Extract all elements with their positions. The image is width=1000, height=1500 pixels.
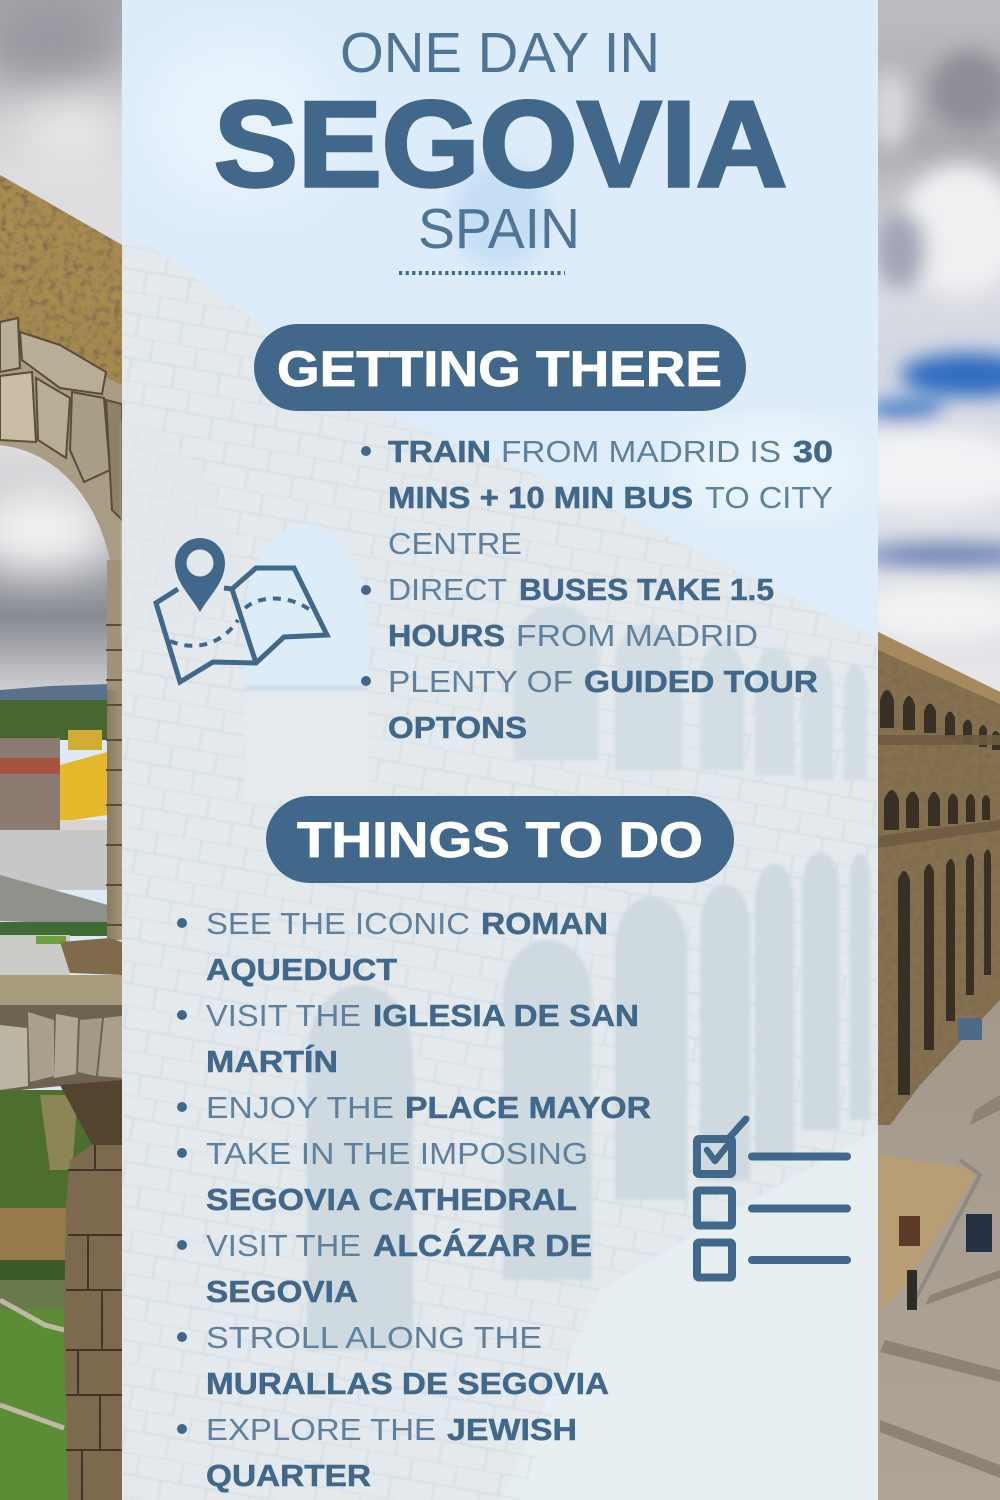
text block: things to do list: ROMAN bbox=[481, 906, 608, 941]
text block: things to do list: EXPLORE THE bbox=[206, 1412, 436, 1447]
text block: getting there list: BUSES TAKE 1.5 bbox=[519, 572, 774, 607]
text block: things to do list: SEGOVIA CATHEDRAL bbox=[206, 1182, 577, 1217]
lower pier bbox=[60, 1080, 122, 1500]
text block: things to do list: QUARTER bbox=[206, 1458, 371, 1493]
text block: things to do list: STROLL ALONG THE bbox=[206, 1320, 542, 1355]
ledge bbox=[60, 938, 122, 975]
text block: getting there list: TO CITY bbox=[705, 480, 833, 515]
left pier shading bbox=[122, 420, 245, 640]
text block: things to do list: AQUEDUCT bbox=[206, 952, 397, 987]
text block: getting there list: HOURS bbox=[388, 618, 505, 653]
text block: things to do list: JEWISH bbox=[447, 1412, 577, 1447]
text block: things to do list: ALCÁZAR DE bbox=[373, 1228, 592, 1263]
panel: translucent central column with washed aqueduct bbox=[122, 0, 878, 1500]
text block: getting there list: FROM MADRID IS bbox=[501, 434, 781, 469]
upper-tier openings bbox=[245, 525, 368, 800]
icon: map with location pin bbox=[156, 538, 327, 682]
heading: getting there: GETTING THERE bbox=[277, 341, 722, 397]
text block: getting there list: DIRECT bbox=[388, 572, 507, 607]
text block: getting there list: PLENTY OF bbox=[388, 664, 573, 699]
ivy and grass bbox=[0, 1090, 122, 1210]
heading: things to do: THINGS TO DO bbox=[297, 812, 703, 868]
heading: things to do bbox=[266, 796, 734, 883]
ground and stairs bbox=[878, 1000, 1000, 1500]
title line: SEGOVIA: SEGOVIA bbox=[214, 76, 787, 212]
text block: things to do list: MURALLAS DE SEGOVIA bbox=[206, 1366, 609, 1401]
large stone band bbox=[0, 1005, 122, 1092]
text block: things to do list: SEE THE ICONIC bbox=[206, 906, 470, 941]
text block: getting there list: FROM MADRID bbox=[516, 618, 758, 653]
scene through arch bbox=[0, 684, 110, 710]
icon: checklist bbox=[697, 1119, 847, 1278]
text block: things to do list: IGLESIA DE SAN bbox=[373, 998, 639, 1033]
upper rubble and arch ring bbox=[0, 175, 122, 940]
photo: left strip with stone arch bbox=[0, 0, 122, 1500]
text block: things to do list: SEGOVIA bbox=[206, 1274, 358, 1309]
title line: ONE DAY IN: ONE DAY IN bbox=[340, 21, 660, 85]
text block: things to do list: PLACE MAYOR bbox=[405, 1090, 651, 1125]
text block: getting there list: GUIDED TOUR bbox=[584, 664, 818, 699]
aqueduct wash bbox=[122, 236, 878, 1500]
text block: getting there list bbox=[361, 434, 833, 745]
text block: things to do list bbox=[177, 906, 651, 1493]
sign and figures bbox=[899, 1216, 920, 1246]
photo: right strip with aqueduct bbox=[830, 0, 1000, 1500]
dotted divider bbox=[399, 271, 565, 275]
text block: things to do list: ENJOY THE bbox=[206, 1090, 394, 1125]
lower-tier openings bbox=[307, 852, 870, 1350]
heading: getting there bbox=[254, 324, 746, 411]
title line: SPAIN: SPAIN bbox=[418, 197, 580, 261]
aqueduct body bbox=[878, 632, 1000, 1125]
text block: getting there list: 30 bbox=[793, 434, 833, 469]
text block: things to do list: VISIT THE bbox=[206, 1228, 361, 1263]
text block: getting there list: CENTRE bbox=[388, 526, 522, 561]
text block: getting there list: MINS + 10 MIN BUS bbox=[388, 480, 693, 515]
text block: getting there list: TRAIN bbox=[388, 434, 491, 469]
text block: things to do list: MARTÍN bbox=[206, 1044, 338, 1079]
text block: things to do list: VISIT THE bbox=[206, 998, 361, 1033]
title bbox=[214, 21, 787, 261]
text block: getting there list: OPTONS bbox=[388, 710, 527, 745]
text block: things to do list: TAKE IN THE IMPOSING bbox=[206, 1136, 588, 1171]
